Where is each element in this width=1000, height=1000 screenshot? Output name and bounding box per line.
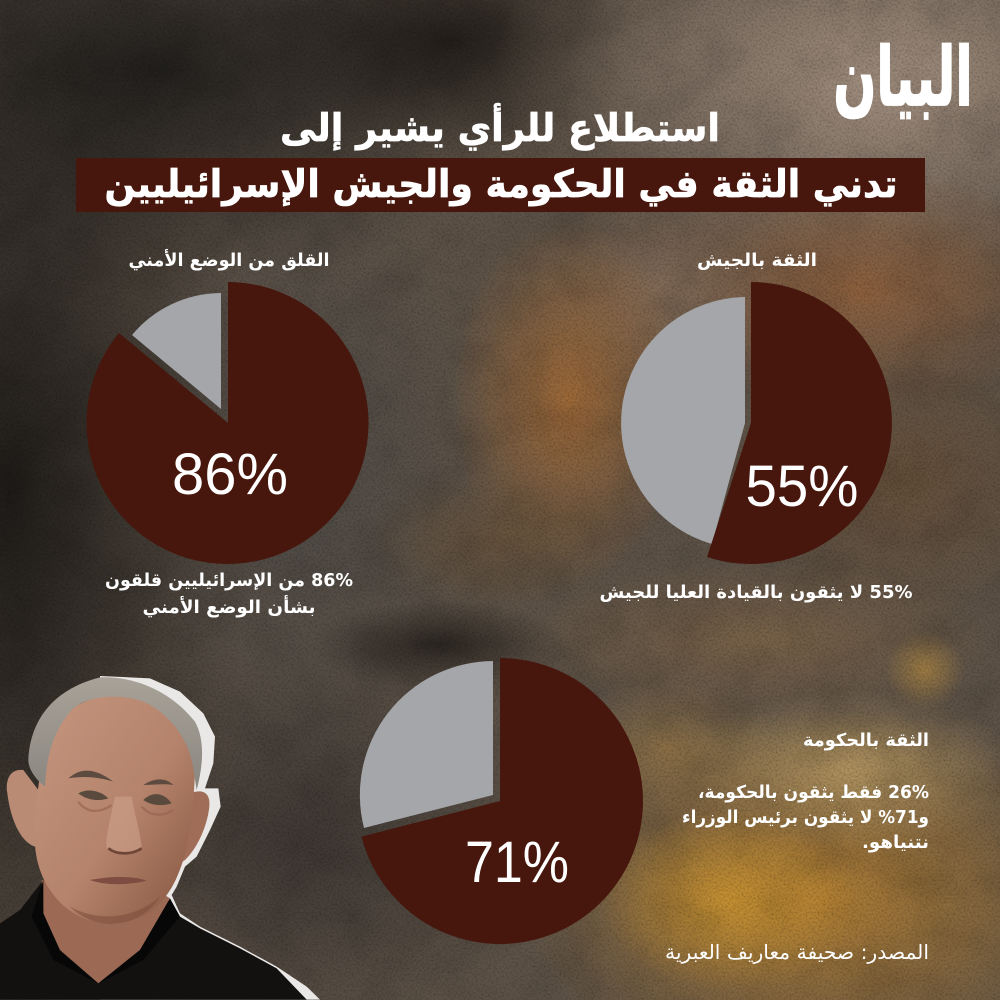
description: government: نتنياهو. (862, 832, 929, 853)
collar (32, 880, 180, 983)
heading: trust in army: الثقة بالجيش (697, 250, 817, 271)
panel: security concern (87, 249, 369, 618)
neck (42, 880, 170, 983)
pie chart: 71%: 71% (465, 830, 569, 895)
left ear (7, 770, 43, 847)
panel: trust in government (360, 658, 929, 944)
heading: trust in government: الثقة بالحكومة (803, 730, 929, 751)
hair (28, 677, 202, 790)
eye bags (78, 802, 173, 815)
mouth (90, 877, 147, 884)
description: government: 26% فقط يثقون بالحكومة، (698, 782, 929, 803)
source note: المصدر: صحيفة معاريف العبرية (665, 940, 929, 964)
shirt (0, 880, 307, 1000)
pie chart: 55%: 55% (746, 454, 858, 519)
title banner: تدني الثقة في الحكومة والجيش الإسرائيليين (104, 162, 898, 207)
caption: security concern (105, 570, 353, 618)
caption: army: 55% لا يثقون بالقيادة العليا للجيش (600, 582, 912, 603)
face (35, 695, 195, 923)
right ear (182, 791, 209, 862)
caption: security concern: بشأن الوضع الأمني (142, 595, 316, 618)
logo: Al Bayan: البيان (833, 29, 973, 124)
pie chart: 86%: 86% (172, 442, 288, 507)
title line one: استطلاع للرأي يشير إلى (280, 103, 720, 151)
chin shadow (70, 897, 160, 924)
pie chart: 86% (87, 282, 369, 564)
white cut-out outline (100, 676, 320, 1000)
eyes (78, 791, 172, 805)
description: government (682, 782, 929, 853)
description: government: و71% لا يثقون برئيس الوزراء (682, 807, 929, 828)
nose (106, 797, 142, 854)
pie chart: 55% (621, 282, 892, 564)
caption: security concern: 86% من الإسرائيليين قلقون (105, 570, 353, 591)
photo: Netanyahu portrait illustration (0, 676, 320, 1000)
heading: security concern: القلق من الوضع الأمني (128, 249, 330, 271)
panel: trust in army (600, 250, 912, 603)
pie chart: 71% (360, 658, 643, 944)
eyebrows (68, 771, 173, 785)
